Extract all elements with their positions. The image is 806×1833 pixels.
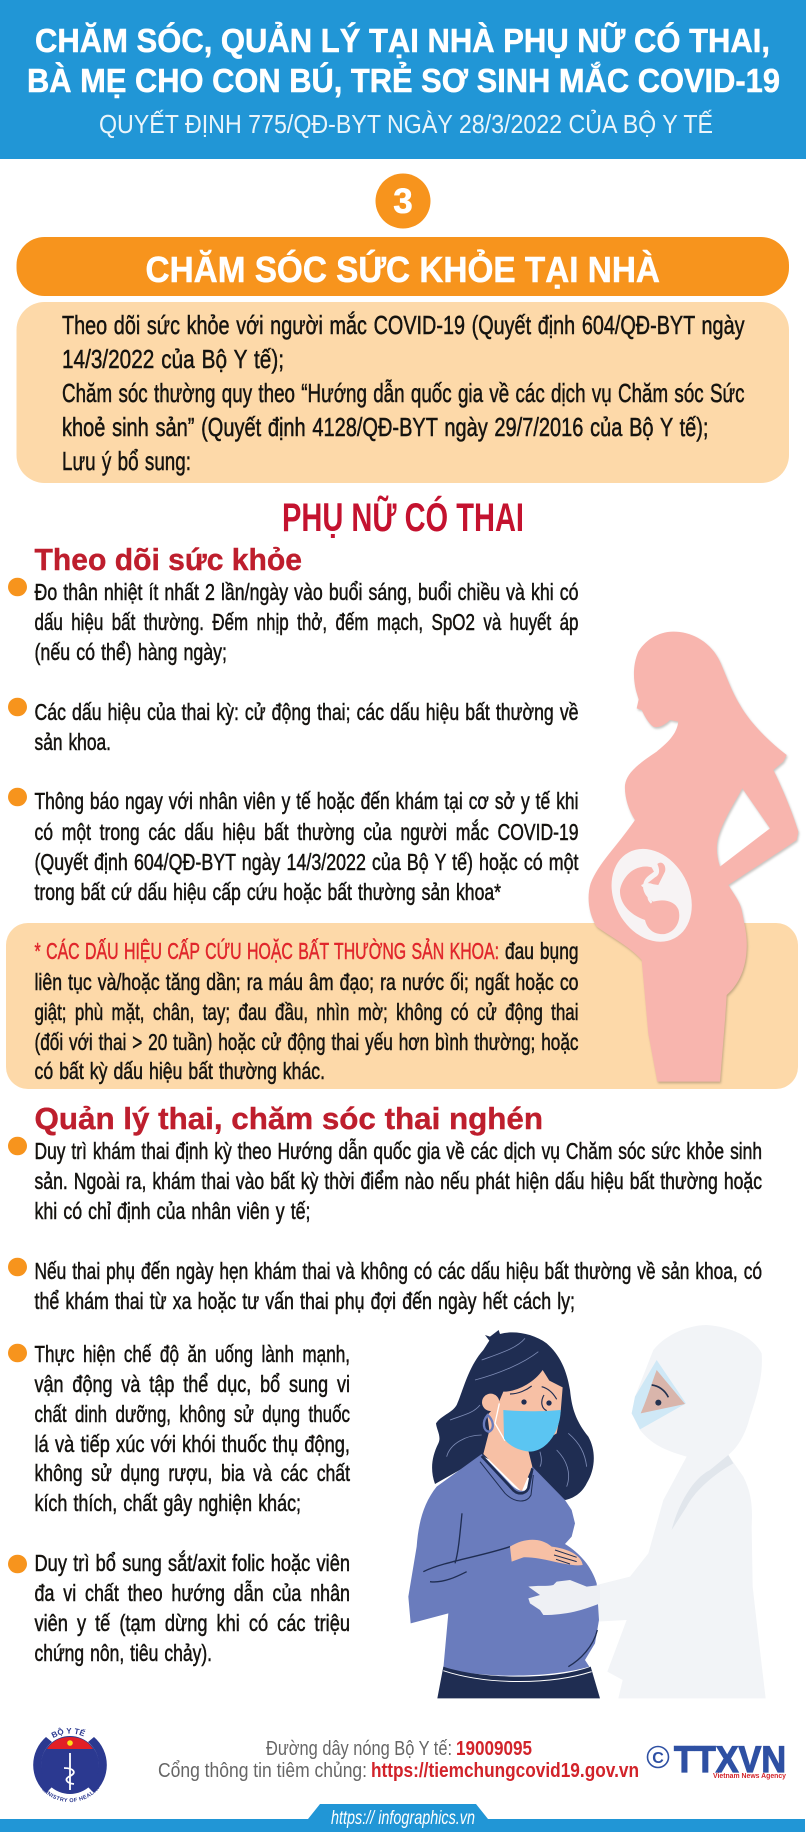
section heading pill [16,237,789,296]
bullet: pregnancy signs: Các dấu hiệu của thai kỳ: cử động thai; các dấu hiệu bất thường về [34,699,578,725]
bullet: pregnancy signs [8,698,578,755]
footer bar with website tab: https:// infographics.vn [331,1808,475,1829]
bullet: iron and folic supplements: đa vi chất theo hướng dẫn của nhân [34,1580,350,1606]
bullet: healthy lifestyle: không sử dụng rượu, bia và các chất [34,1460,350,1486]
bullet: temperature monitoring: Đo thân nhiệt ít nhất 2 lần/ngày vào buổi sáng, buổi chiều và khi có [34,579,578,605]
doctor's gloved hand [528,1580,600,1615]
panel: intro text: 14/3/2022 của Bộ Y tế); [62,344,284,374]
logo: TTXVN: TTXVN [674,1739,786,1780]
header banner [0,0,806,159]
title [27,22,780,99]
panel: emergency signs [6,923,798,1089]
section number badge [376,174,430,228]
bullet: healthy lifestyle: Thực hiện chế độ ăn uống lành mạnh, [34,1341,350,1367]
hotline and portal: https://tiemchungcovid19.gov.vn [371,1760,639,1782]
doctor in protective suit [597,1325,766,1698]
footer bar with website tab [0,1804,805,1832]
panel: emergency signs: (đối với thai > 20 tuần) hoặc cử động thai yếu hơn bình thường; hoặc [34,1029,578,1055]
panel: emergency signs: * CÁC DẤU HIỆU CẤP CỨU HOẶC BẤT THƯỜNG SẢN KHOA: [34,936,499,964]
panel: emergency signs: đau bụng [505,938,578,964]
hotline and portal: Cổng thông tin tiêm chủng: [158,1760,367,1782]
hotline and portal: Đường dây nóng Bộ Y tế: [266,1738,452,1760]
illustration: pregnant woman and doctor [408,1325,766,1698]
heading: pregnant women: PHỤ NỮ CÓ THAI [282,494,524,540]
fetus in womb [596,835,707,956]
hand on belly [510,1540,583,1565]
bullet: healthy lifestyle: vận động và tập thể dục, bổ sung vi [34,1371,350,1397]
bullet: pregnancy signs: sản khoa. [34,729,111,755]
bullet: notify medical staff: (Quyết định 604/QĐ-BYT ngày 14/3/2022 của Bộ Y tế) hoặc có một [34,849,579,875]
bullet: notify medical staff [8,788,579,905]
bullet: temperature monitoring: dấu hiệu bất thường. Đếm nhịp thở, đếm mạch, SpO2 và huyết áp [34,609,578,635]
panel: emergency signs: liên tục và/hoặc tăng dần; ra máu âm đạo; ra nước ối; ngất hoặc co [34,969,578,995]
face mask [503,1410,561,1452]
bullet: healthy lifestyle [8,1341,350,1516]
panel: emergency signs: giật; phù mặt, chân, tay; đau đầu, nhìn mờ; không có cử động thai [34,999,578,1025]
bullet: temperature monitoring: (nếu có thể) hàng ngày; [34,639,227,665]
bullet: remote checkups: thể khám thai từ xa hoặc tư vấn thai phụ đợi đến ngày hết cách ly; [34,1288,575,1314]
bullet: healthy lifestyle: chất dinh dưỡng, không sử dụng thuốc [34,1401,350,1427]
trousers [437,1667,600,1698]
hotline and portal: 19009095 [456,1738,532,1760]
panel: emergency signs: có bất kỳ dấu hiệu bất thường khác. [34,1058,325,1084]
bullet: iron and folic supplements [8,1550,350,1666]
bullet: iron and folic supplements: viên y tế (tạm dừng khi có các triệu [34,1610,350,1636]
bullet: remote checkups [8,1258,762,1314]
bullet: notify medical staff: trong bất cứ dấu hiệu cấp cứu hoặc bất thường sản khoa* [34,879,501,905]
title: CHĂM SÓC, QUẢN LÝ TẠI NHÀ PHỤ NỮ CÓ THAI, [35,22,770,59]
logo: TTXVN: Vietnam News Agency [713,1771,787,1780]
section heading pill: CHĂM SÓC SỨC KHỎE TẠI NHÀ [146,248,660,290]
bullet: iron and folic supplements: Duy trì bổ sung sắt/axit folic hoặc viên [34,1550,350,1576]
bullet: temperature monitoring [8,578,578,665]
section number badge: 3 [393,182,413,221]
logo: Ministry of Health: MINISTRY OF HEALTH [42,1788,100,1802]
bullet: iron and folic supplements: chứng nôn, tiêu chảy). [34,1640,212,1666]
subtitle: QUYẾT ĐỊNH 775/QĐ-BYT NGÀY 28/3/2022 CỦA BỘ Y TẾ [99,108,713,139]
pregnant woman [408,1330,600,1698]
bullet: healthy lifestyle: kích thích, chất gây nghiện khác; [34,1490,301,1516]
bullet: notify medical staff: Thông báo ngay với nhân viên y tế hoặc đến khám tại cơ sở y tế khi [34,788,578,814]
heading: pregnancy management: Quản lý thai, chăm sóc thai nghén [34,1101,543,1136]
logo: Ministry of Health: BỘ Y TẾ [51,1728,86,1738]
bullet: notify medical staff: có một trong các dấu hiệu bất thường của người mắc COVID-19 [34,819,578,845]
logo: Ministry of Health [33,1728,107,1802]
bullet: healthy lifestyle: lá và tiếp xúc với khói thuốc thụ động, [34,1431,350,1457]
hotline and portal [158,1738,639,1782]
panel: intro text [16,302,789,483]
illustration: pregnant silhouette [589,632,798,1082]
panel: intro text: Lưu ý bổ sung: [62,446,191,476]
bullet: regular antenatal checkups [8,1137,762,1224]
bullet: regular antenatal checkups: khi có chỉ định của nhân viên y tế; [34,1198,310,1224]
heading: health monitoring: Theo dõi sức khỏe [34,542,302,577]
sweater [408,1454,599,1676]
logo: TTXVN: C [652,1750,664,1767]
